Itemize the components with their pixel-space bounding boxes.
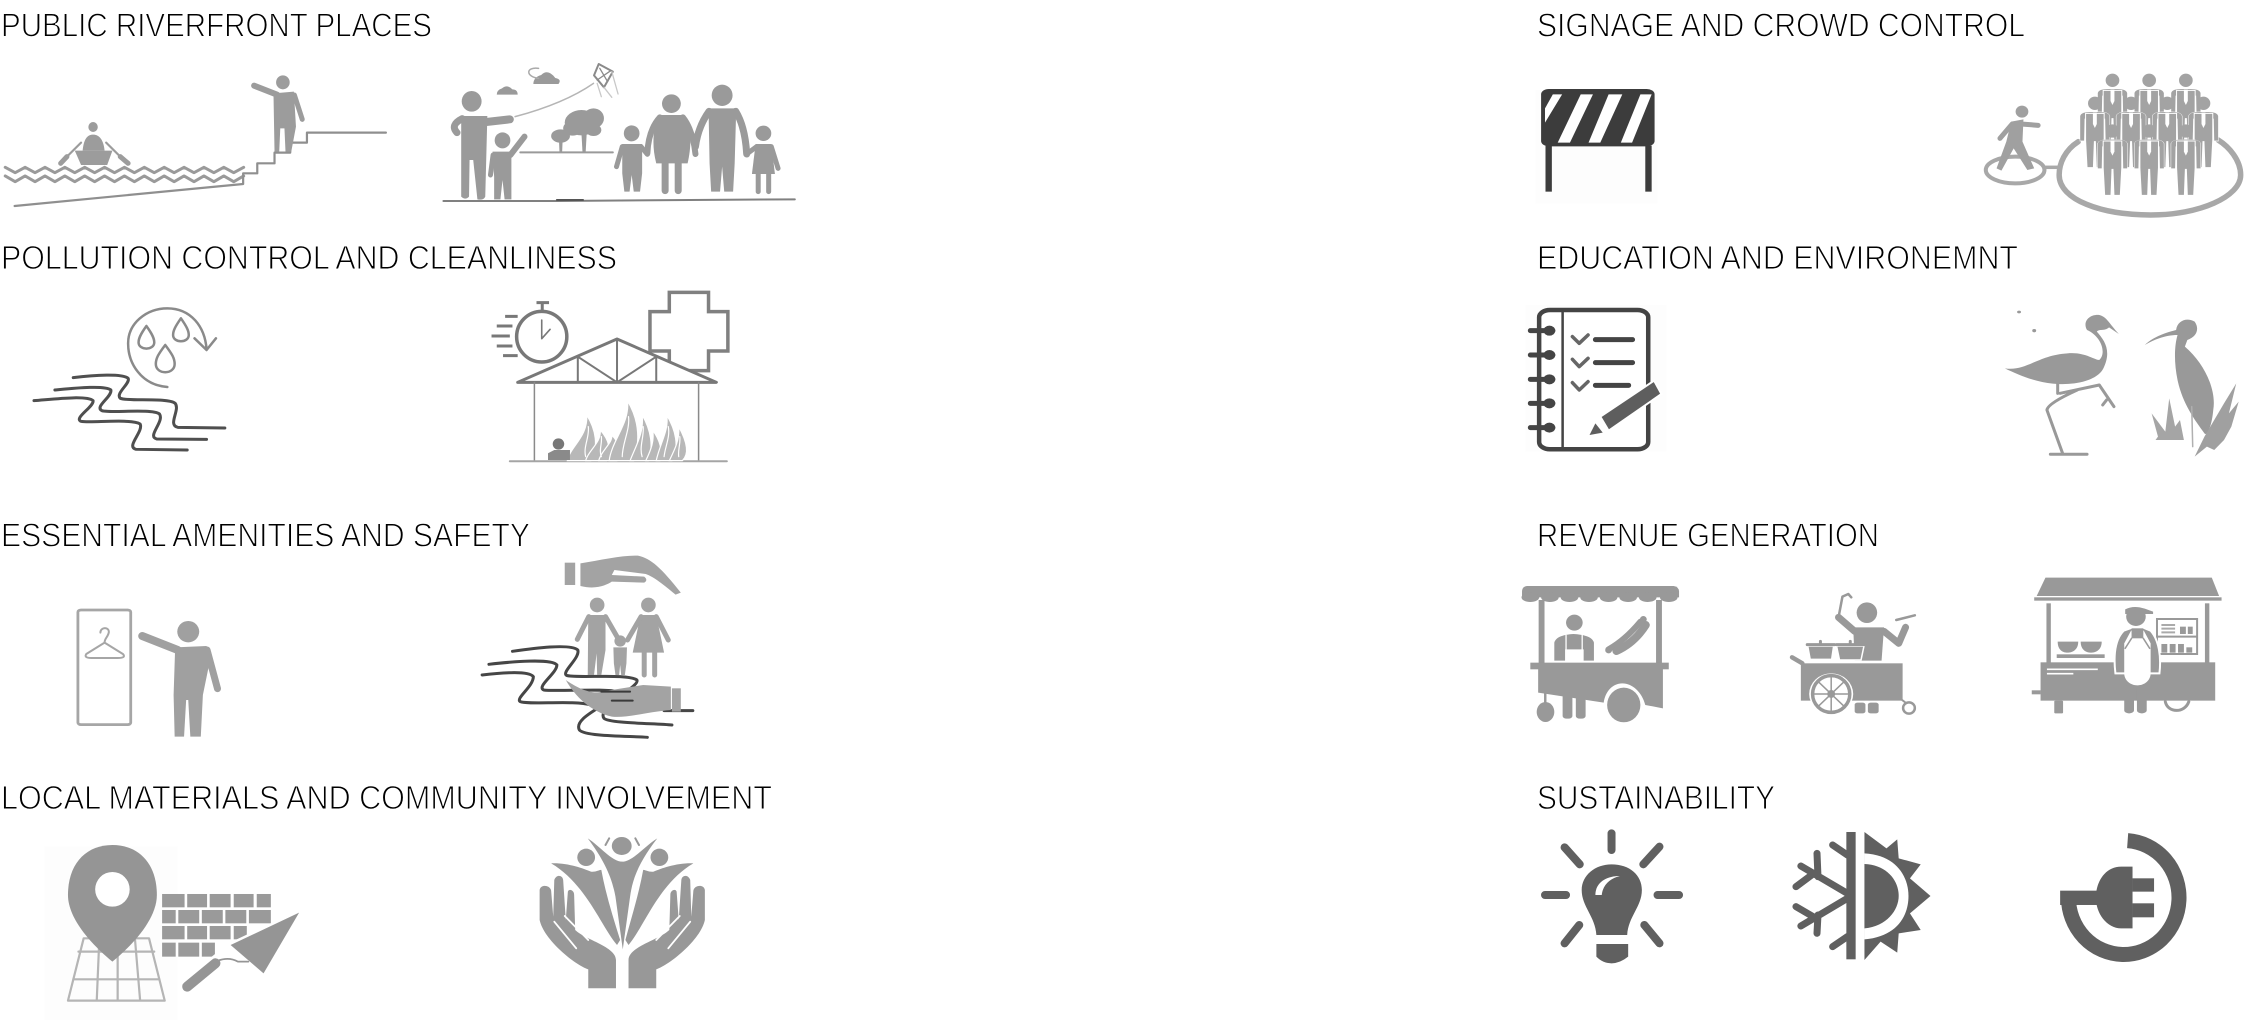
icon: hot dog cart	[1522, 586, 1679, 722]
icon: hands holding community	[540, 837, 705, 988]
icon: snowflake and sun	[1796, 832, 1930, 960]
heading: signage: SIGNAGE AND CROWD CONTROL	[1537, 6, 2025, 44]
icon: two wading birds	[2005, 311, 2239, 457]
icon: fire station with stopwatch and cross	[492, 292, 728, 461]
icon: notebook checklist with pencil	[1525, 305, 1666, 452]
icon: cook at food cart	[1792, 594, 1915, 715]
icon: location pin, bricks and trowel	[44, 845, 299, 1020]
heading: public riverfront places: PUBLIC RIVERFRONT PLACES	[1, 6, 432, 44]
heading: pollution control: POLLUTION CONTROL AND CLEANLINESS	[1, 239, 617, 276]
icon: rower on river and man on steps	[5, 75, 386, 206]
heading: revenue: REVENUE GENERATION	[1537, 516, 1879, 554]
heading: education: EDUCATION AND ENVIRONEMNT	[1537, 239, 2018, 276]
icon: river with water-drop cycle	[34, 308, 225, 450]
heading: sustainability: SUSTAINABILITY	[1537, 779, 1775, 816]
icon: road barrier	[1535, 89, 1658, 203]
heading: essential amenities: ESSENTIAL AMENITIES AND SAFETY	[1, 516, 530, 554]
icon: person leaving crowd	[1986, 74, 2241, 215]
icon: power plug ring	[2060, 841, 2179, 955]
icon: person at changing room door	[78, 610, 218, 737]
icon: light bulb	[1545, 833, 1679, 963]
icon: family flying a kite	[443, 64, 795, 201]
icon: hands protecting family over river	[482, 556, 693, 737]
heading: local materials: LOCAL MATERIALS AND COMMUNITY INVOLVEMENT	[1, 779, 772, 816]
icon: vendor at food stall	[2032, 578, 2222, 713]
